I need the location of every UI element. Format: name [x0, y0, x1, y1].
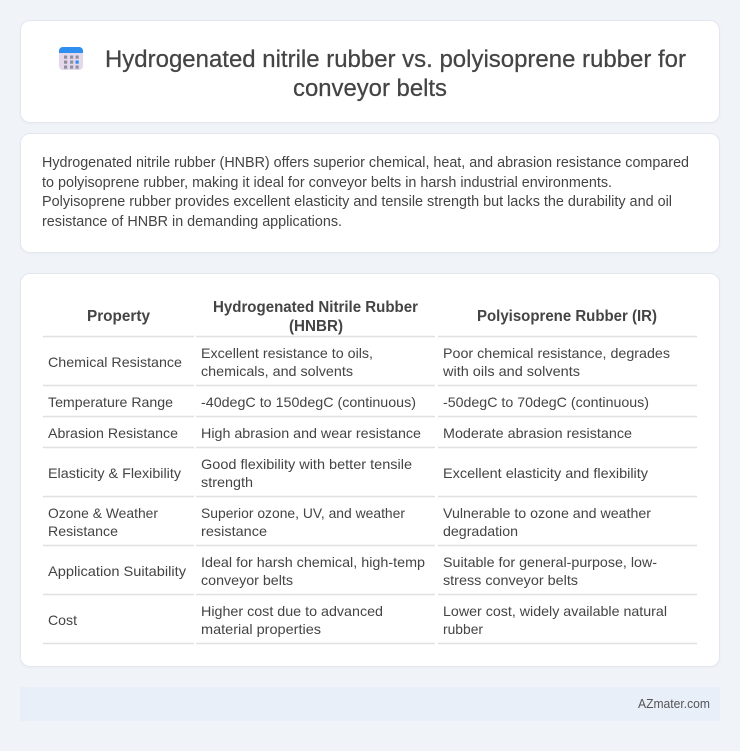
- row: temperature range: [48, 394, 649, 410]
- title: conveyor belts: [293, 75, 447, 102]
- row: abrasion resistance: [48, 425, 632, 441]
- row: chemical resistance: Chemical Resistance: [48, 354, 182, 370]
- title: Hydrogenated nitrile rubber vs. polyisoprene rubber for: [105, 46, 686, 73]
- row: temperature range: -40degC to 150degC (continuous): [201, 394, 416, 410]
- row: cost: Cost: [48, 612, 77, 628]
- row: elasticity and flexibility: [48, 456, 648, 490]
- table header: Hydrogenated Nitrile Rubber: [213, 299, 418, 316]
- row: cost: [48, 603, 667, 637]
- row: application suitability: conveyor belts: [201, 572, 293, 588]
- row: ozone and weather resistance: Vulnerable to ozone and weather: [443, 505, 651, 521]
- footer brand: AZmater.com: [638, 697, 710, 711]
- row: chemical resistance: Poor chemical resistance, degrades: [443, 345, 670, 361]
- table header: (HNBR): [289, 318, 343, 335]
- icon: calendar: [59, 47, 83, 70]
- table: [43, 299, 697, 644]
- title: [105, 46, 686, 102]
- row: application suitability: Suitable for general-purpose, low-: [443, 554, 657, 570]
- row: ozone and weather resistance: degradation: [443, 523, 518, 539]
- row: application suitability: Application Suitability: [48, 563, 186, 579]
- row: ozone and weather resistance: resistance: [201, 523, 267, 539]
- intro text: [42, 155, 689, 230]
- row: temperature range: -50degC to 70degC (continuous): [443, 394, 649, 410]
- row: application suitability: stress conveyor belts: [443, 572, 578, 588]
- row: cost: Lower cost, widely available natural: [443, 603, 667, 619]
- row: cost: Higher cost due to advanced: [201, 603, 383, 619]
- row: ozone and weather resistance: Ozone & Weather: [48, 505, 158, 521]
- intro text: resistance of HNBR in demanding applications.: [42, 214, 342, 230]
- row: cost: rubber: [443, 621, 483, 637]
- row: ozone and weather resistance: [48, 505, 651, 539]
- row: elasticity and flexibility: Excellent elasticity and flexibility: [443, 465, 648, 481]
- intro text: Hydrogenated nitrile rubber (HNBR) offers superior chemical, heat, and abrasion resistance compared: [42, 155, 689, 171]
- row: chemical resistance: Excellent resistance to oils,: [201, 345, 373, 361]
- panel: footer bar: [20, 687, 720, 721]
- panel: intro card: [20, 133, 720, 253]
- row: abrasion resistance: High abrasion and wear resistance: [201, 425, 421, 441]
- row: abrasion resistance: Abrasion Resistance: [48, 425, 178, 441]
- intro text: Polyisoprene rubber provides excellent elasticity and tensile strength but lacks the durability and oil: [42, 194, 672, 210]
- row: chemical resistance: chemicals, and solvents: [201, 363, 353, 379]
- row: elasticity and flexibility: Good flexibility with better tensile: [201, 456, 412, 472]
- row: application suitability: Ideal for harsh chemical, high-temp: [201, 554, 425, 570]
- intro text: to polyisoprene rubber, making it ideal for conveyor belts in harsh industrial environments.: [42, 175, 612, 191]
- row: chemical resistance: [48, 345, 670, 379]
- row: elasticity and flexibility: strength: [201, 474, 253, 490]
- row: temperature range: Temperature Range: [48, 394, 173, 410]
- row: ozone and weather resistance: Superior ozone, UV, and weather: [201, 505, 405, 521]
- row: application suitability: [48, 554, 657, 588]
- panel: title card: [20, 20, 720, 123]
- row: chemical resistance: with oils and solvents: [442, 363, 580, 379]
- row: abrasion resistance: Moderate abrasion resistance: [443, 425, 632, 441]
- row: ozone and weather resistance: Resistance: [48, 523, 118, 539]
- panel: table card: [20, 273, 720, 667]
- table header: Property: [87, 308, 150, 325]
- row: cost: material properties: [201, 621, 321, 637]
- table header: Polyisoprene Rubber (IR): [477, 308, 657, 325]
- row: elasticity and flexibility: Elasticity & Flexibility: [48, 465, 181, 481]
- table header: [87, 299, 657, 335]
